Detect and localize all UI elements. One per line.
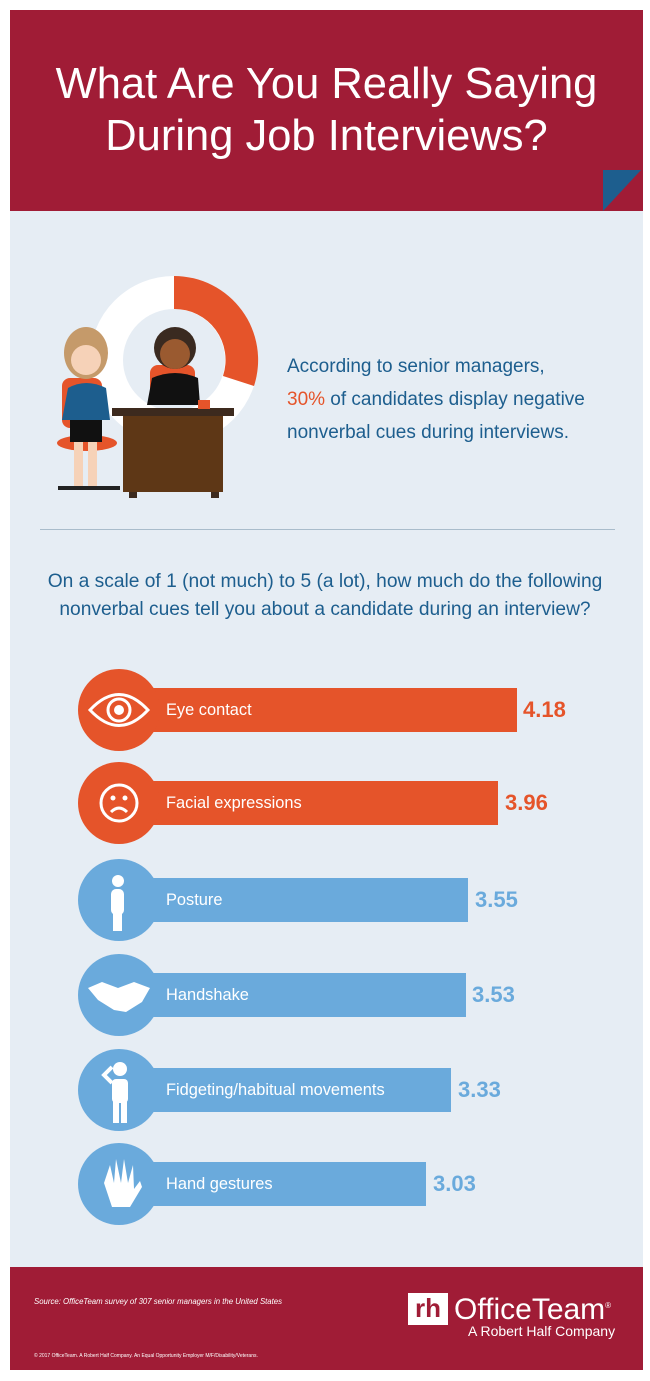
stat text bbox=[287, 356, 585, 443]
logo bbox=[408, 1293, 616, 1339]
title: During Job Interviews? bbox=[105, 112, 548, 160]
bar: handshake bbox=[78, 954, 515, 1036]
question bbox=[48, 571, 602, 620]
bar: fidgeting: 3.33 bbox=[458, 1077, 501, 1102]
bar: facial expressions: 3.96 bbox=[505, 790, 548, 815]
bar: eye contact: 4.18 bbox=[523, 697, 566, 722]
stat text: nonverbal cues during interviews. bbox=[287, 422, 569, 443]
header bbox=[10, 10, 643, 211]
bar: posture: Posture bbox=[166, 891, 222, 909]
title bbox=[56, 60, 597, 160]
logo: OfficeTeam® bbox=[454, 1293, 611, 1326]
divider bbox=[40, 529, 615, 530]
logo: rh bbox=[415, 1293, 441, 1323]
bar: facial expressions bbox=[78, 762, 548, 844]
woman 1 bbox=[62, 378, 102, 428]
footer bbox=[10, 1267, 643, 1370]
woman 2 bbox=[150, 365, 195, 405]
copyright: © 2017 OfficeTeam. A Robert Half Company. An Equal Opportunity Employer M/F/Disability/Veterans. bbox=[34, 1353, 258, 1359]
bar: handshake: 3.53 bbox=[472, 982, 515, 1007]
bar: posture bbox=[78, 859, 518, 941]
stat text: According to senior managers, bbox=[287, 356, 545, 377]
title: What Are You Really Saying bbox=[56, 60, 597, 108]
question: nonverbal cues tell you about a candidate during an interview? bbox=[59, 599, 591, 620]
bar: eye contact: Eye contact bbox=[166, 701, 252, 719]
logo: A Robert Half Company bbox=[468, 1323, 615, 1339]
bar: handshake: Handshake bbox=[166, 986, 249, 1004]
corner fold bbox=[603, 170, 641, 211]
bar: posture: 3.55 bbox=[475, 887, 518, 912]
source: Source: OfficeTeam survey of 307 senior managers in the United States bbox=[34, 1297, 282, 1306]
bar: fidgeting bbox=[78, 1049, 501, 1131]
bar: hand gestures bbox=[78, 1143, 476, 1225]
bar: fidgeting: Fidgeting/habitual movements bbox=[166, 1081, 385, 1099]
bar: facial expressions: Facial expressions bbox=[166, 794, 302, 812]
bar: hand gestures: 3.03 bbox=[433, 1171, 476, 1196]
stat text: 30% of candidates display negative bbox=[287, 389, 585, 410]
question: On a scale of 1 (not much) to 5 (a lot), how much do the following bbox=[48, 571, 602, 592]
donut chart with illustration bbox=[57, 276, 258, 498]
desk bbox=[112, 408, 234, 416]
bar: hand gestures: Hand gestures bbox=[166, 1175, 273, 1193]
bar: eye contact bbox=[78, 669, 566, 751]
